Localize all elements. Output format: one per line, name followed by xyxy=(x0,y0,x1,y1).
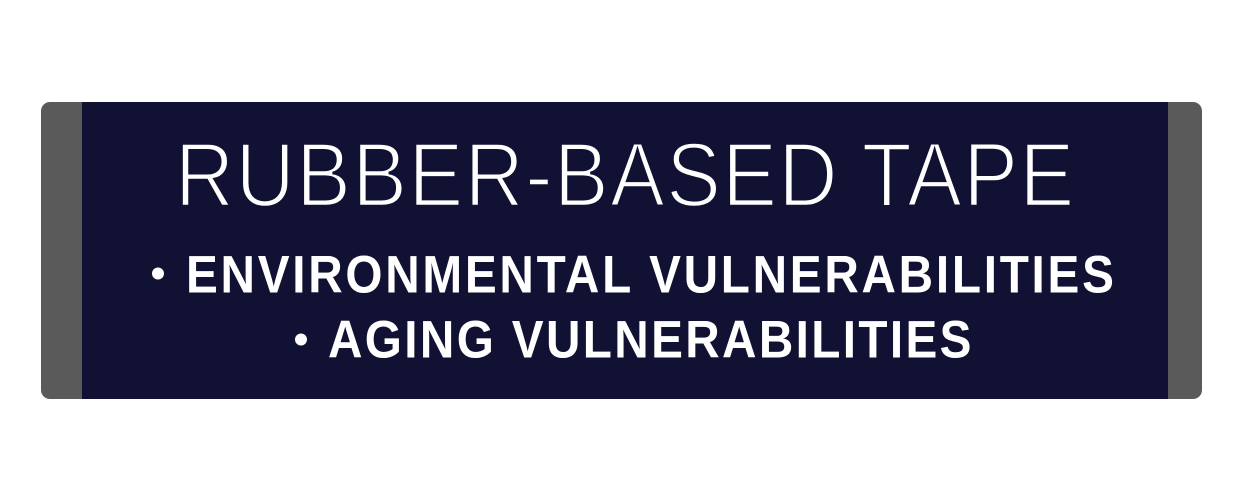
bullet: environmental vulnerabilities: ENVIRONMENTAL VULNERABILITIES xyxy=(186,244,1114,304)
title: RUBBER-BASED TAPE xyxy=(175,125,1074,226)
bullet: aging vulnerabilities: AGING VULNERABILITIES xyxy=(328,309,972,369)
navy tape panel xyxy=(82,102,1168,399)
tape end caps xyxy=(41,102,1202,399)
